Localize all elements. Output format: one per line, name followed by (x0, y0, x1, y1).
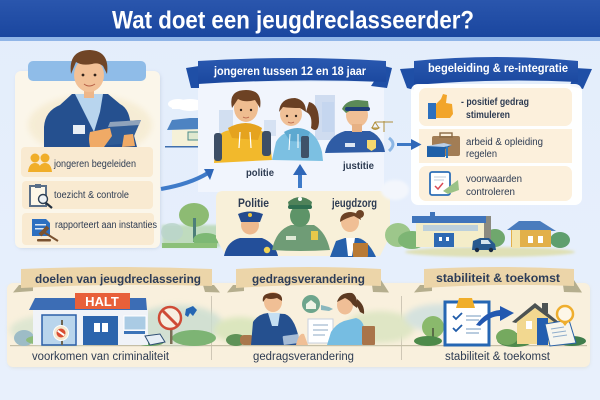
label: justitie: justitie (342, 161, 374, 172)
ribbon: jongeren tussen 12 en 18 jaar: jongeren tussen 12 en 18 jaar (213, 66, 366, 78)
panel: police, jeugdzorg (216, 191, 390, 257)
ribbon: doelen van jeugdreclassering: doelen van jeugdreclassering (35, 274, 201, 286)
illustration: coaching conversation (240, 292, 375, 345)
text: arbeid en opleiding regelen: regelen (466, 149, 497, 160)
title banner (0, 0, 600, 41)
caption: voorkomen van criminaliteit: voorkomen van criminaliteit (32, 351, 170, 363)
panel: young people, police and justice (198, 82, 393, 192)
caption: gedragsverandering: gedragsverandering (253, 351, 354, 363)
text: jongeren begeleiden: jongeren begeleiden (53, 159, 136, 170)
title banner: Wat doet een jeugdreclasseerder? (112, 6, 474, 34)
label: jeugdzorg: jeugdzorg (331, 198, 377, 210)
panel: begeleiding and re-integratie (411, 84, 582, 205)
ribbon: jongeren tussen 12 en 18 jaar (186, 58, 392, 88)
illustration: HALT building: HALT (85, 294, 119, 309)
icon: report and gavel (32, 219, 58, 242)
icon: briefcase and graduation cap (426, 133, 460, 158)
caption: stabiliteit en toekomst: stabiliteit & toekomst (445, 351, 551, 363)
text: voorwaarden controleren: controleren (466, 187, 515, 198)
illustration: youth worker with clipboard (44, 50, 141, 147)
text: arbeid en opleiding regelen: arbeid & opleiding (466, 137, 543, 148)
icon: thumbs up (428, 94, 453, 119)
panel: doelen, gedragsverandering, stabiliteit (7, 283, 590, 368)
illustration: justice officer (325, 100, 385, 153)
ribbon: gedragsverandering (227, 267, 389, 292)
illustration: police officer (224, 212, 278, 256)
ribbon: stabiliteit en toekomst (414, 267, 582, 292)
text: voorwaarden controleren (466, 174, 522, 198)
ground line (10, 304, 587, 347)
illustration: girl in blue hoodie (272, 98, 323, 161)
ribbon: gedragsverandering: gedragsverandering (252, 274, 365, 286)
icon: scales of justice (372, 121, 393, 132)
text: rapporteert aan instanties: rapporteert aan instanties (55, 220, 157, 231)
ribbon: begeleiding en re-integratie: begeleiding & re-integratie (428, 63, 568, 75)
text: toezicht en controle: toezicht & controle (54, 190, 129, 201)
text: voorwaarden controleren: voorwaarden (466, 174, 522, 185)
icon: people (28, 154, 52, 172)
ribbon: begeleiding en re-integratie (400, 57, 592, 90)
panel: youth worker (15, 50, 161, 249)
arrow: from worker to youth (161, 169, 214, 189)
text: positief gedrag stimuleren (461, 97, 529, 121)
text: positief gedrag stimuleren: stimuleren (466, 110, 510, 121)
text: positief gedrag stimuleren: - positief gedrag (461, 97, 529, 108)
ribbon: doelen van jeugdreclassering (13, 267, 220, 292)
icon: no-entry sign with handcuffs (145, 306, 197, 345)
illustration: HALT building (29, 293, 148, 345)
illustration: green officer (272, 197, 330, 251)
illustration: boy in yellow hoodie (214, 90, 272, 163)
label: politie: politie (246, 168, 274, 179)
illustration: care worker with folder (330, 210, 376, 257)
icon: conditions checklist (430, 172, 459, 195)
label: Politie: Politie (238, 198, 269, 210)
arrow: to re-integratie panel (389, 138, 422, 151)
background scene: left house and trees (161, 99, 238, 248)
arrow: from agencies to youth (293, 164, 307, 188)
background scene: right school, car and house (381, 180, 575, 257)
text: arbeid en opleiding regelen (466, 137, 543, 160)
ribbon: stabiliteit en toekomst: stabiliteit & toekomst (436, 273, 560, 285)
icon: clipboard with magnifier (30, 184, 52, 208)
illustration: clipboard, arrow and new home (414, 298, 576, 346)
